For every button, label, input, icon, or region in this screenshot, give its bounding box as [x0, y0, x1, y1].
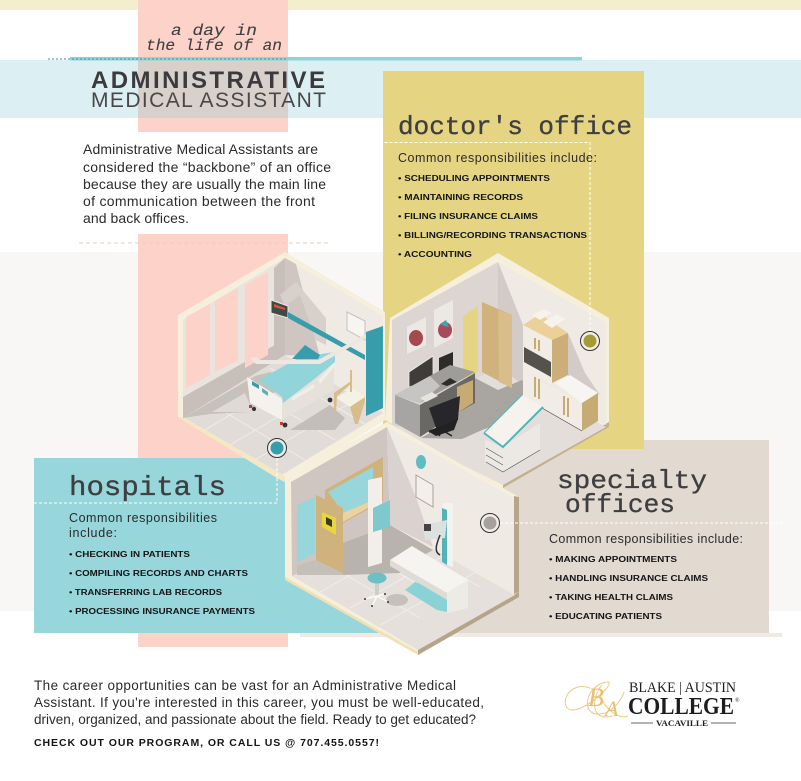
chart: [347, 312, 365, 340]
logo: Blake Austin College: A: [603, 696, 619, 721]
title: the life of an: [146, 37, 282, 55]
panel: hospitals text: include:: [69, 526, 117, 540]
bed: [290, 405, 345, 430]
intro text: of communication between the front: [83, 193, 315, 209]
cabinet: [523, 325, 552, 383]
title: a day in: [171, 22, 257, 40]
panel: hospitals text: • PROCESSING INSURANCE PAYMENTS: [69, 606, 255, 616]
footer text: CHECK OUT OUR PROGRAM, OR CALL US @ 707.455.0557!: [34, 737, 379, 749]
footer text: The career opportunities can be vast for an Administrative Medical: [34, 678, 456, 693]
logo: Blake Austin College: BLAKE | AUSTIN: [629, 680, 736, 696]
panel: specialty offices text: Common responsibilities include:: [549, 532, 743, 546]
exam room illustration: [285, 422, 519, 655]
panel: hospitals text: Common responsibilities: [69, 511, 217, 525]
intro text: and back offices.: [83, 210, 189, 226]
chair: [429, 396, 460, 428]
panel: specialty offices text: • MAKING APPOINTMENTS: [549, 554, 677, 564]
doctor's office illustration: [385, 253, 609, 488]
panel: specialty offices text: • HANDLING INSURANCE CLAIMS: [549, 573, 708, 583]
panel: hospitals text: • COMPILING RECORDS AND CHARTS: [69, 568, 248, 578]
footer text: driven, organized, and passionate about the field. Ready to get educated?: [34, 712, 476, 727]
panel: doctor's office text: • ACCOUNTING: [398, 249, 472, 259]
title: MEDICAL ASSISTANT: [91, 89, 326, 112]
panel: doctor's office text: doctor's office: [398, 112, 632, 142]
chair: [351, 370, 364, 405]
panel: hospitals text: • CHECKING IN PATIENTS: [69, 549, 190, 559]
panel: specialty offices text: • TAKING HEALTH CLAIMS: [549, 592, 673, 602]
intro text: Administrative Medical Assistants are: [83, 141, 318, 157]
title: ADMINISTRATIVE: [91, 67, 325, 94]
panel: specialty offices text: [549, 466, 743, 621]
logo: Blake Austin College: VACAVILLE: [656, 719, 708, 728]
logo: Blake Austin College: B: [588, 683, 604, 712]
title: [48, 22, 582, 112]
stool: [386, 594, 408, 606]
panel: doctor's office text: • MAINTAINING RECORDS: [398, 192, 523, 202]
panel: doctor's office text: • BILLING/RECORDING TRANSACTIONS: [398, 230, 587, 240]
monitor: [409, 356, 433, 387]
panel: doctor's office text: [398, 112, 632, 259]
curtain rail: [250, 325, 384, 364]
markers and connector lines: [34, 142, 785, 532]
footer text: Assistant. If you're interested in this career, you must be well-educated,: [34, 695, 484, 710]
panel: hospitals text: [69, 473, 255, 616]
logo: Blake Austin College: ®: [735, 697, 740, 704]
x-ray table: [405, 582, 448, 612]
logo: Blake Austin College: [565, 680, 740, 728]
exam table: [485, 423, 540, 472]
desk: [395, 365, 475, 403]
intro text: because they are usually the main line: [83, 176, 326, 192]
panel: specialty offices text: offices: [565, 490, 675, 520]
footer text: [34, 678, 484, 749]
hospital room illustration: [178, 252, 385, 482]
panel: hospitals text: hospitals: [69, 473, 226, 504]
posters: [407, 317, 426, 354]
panel: specialty offices text: • EDUCATING PATIENTS: [549, 611, 662, 621]
intro text: [83, 141, 331, 226]
panel: hospitals text: • TRANSFERRING LAB RECORDS: [69, 587, 222, 597]
panel: specialty offices text: specialty: [557, 466, 707, 496]
logo: Blake Austin College: COLLEGE: [628, 694, 734, 720]
x-ray column: [368, 477, 382, 567]
panel: doctor's office text: • FILING INSURANCE CLAIMS: [398, 211, 538, 221]
door and window: [297, 497, 315, 563]
intro text: considered the “backbone” of an office: [83, 159, 331, 175]
panel: doctor's office text: • SCHEDULING APPOINTMENTS: [398, 173, 550, 183]
panel: doctor's office text: Common responsibilities include:: [398, 151, 597, 165]
monitor: [271, 300, 288, 318]
